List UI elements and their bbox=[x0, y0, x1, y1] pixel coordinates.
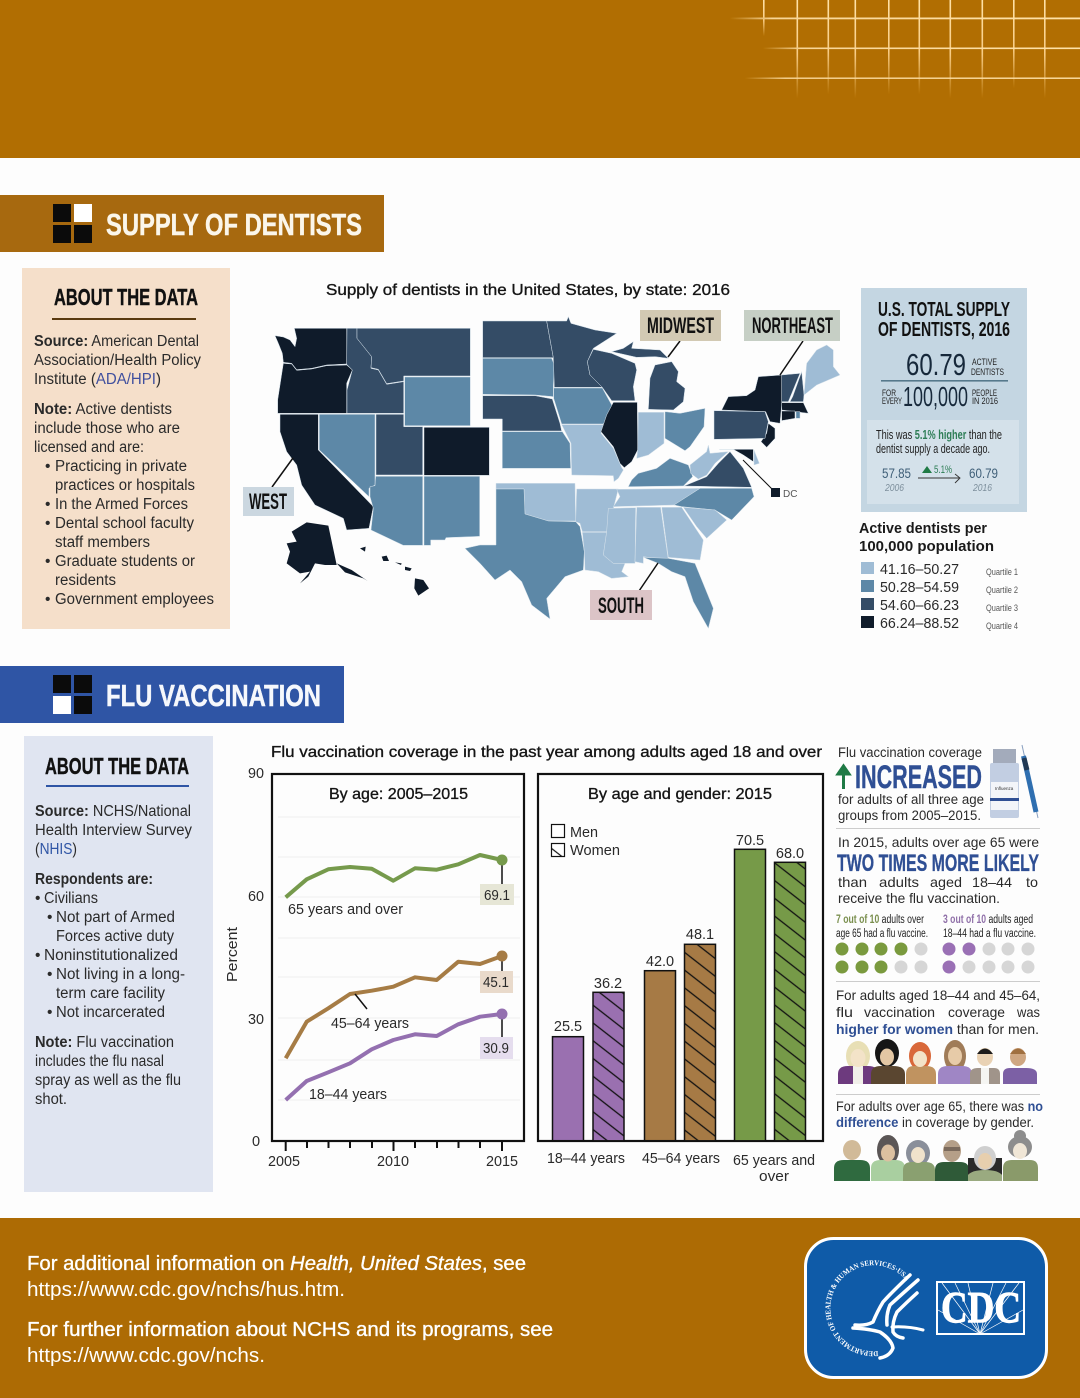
panel: U.S. total supply of dentists: dentist supply a decade ago. bbox=[876, 441, 990, 456]
map legend: active dentists per 100,000 population: 50.28–54.59 bbox=[880, 580, 959, 596]
bar chart: by age and gender 2015: 48.1 bbox=[686, 927, 714, 943]
footer text: For additional information on Health, United States, see bbox=[27, 1253, 526, 1275]
panel: about the data (flu): (NHIS) bbox=[35, 841, 77, 858]
callout: no difference: difference in coverage by gender. bbox=[836, 1114, 1034, 1130]
region label: northeast bbox=[744, 310, 840, 375]
callout: coverage increased: INCREASED bbox=[855, 759, 982, 795]
panel: about the data (dentists): Institute (ADA/HPI) bbox=[34, 371, 161, 388]
icon: HHS eagle seal: DEPARTMENT OF HEALTH & HUMAN SERVICES·USA bbox=[825, 1260, 907, 1356]
line chart: by age 2005-2015: Percent bbox=[225, 927, 241, 982]
panel: about the data (flu): term care facility bbox=[56, 985, 165, 1002]
panel: about the data (flu): includes the flu nasal bbox=[35, 1053, 164, 1070]
callout: two times more likely bbox=[837, 834, 1039, 906]
panel: about the data (flu): Health Interview Survey bbox=[35, 822, 192, 839]
panel: about the data (flu): Not living in a long- bbox=[56, 966, 185, 983]
line chart: by age 2005-2015: 2005 bbox=[268, 1154, 300, 1170]
panel: about the data (dentists): • bbox=[45, 591, 50, 608]
map legend: active dentists per 100,000 population: 100,000 population bbox=[859, 538, 994, 555]
callout: higher for women: flu bbox=[836, 1004, 853, 1020]
panel: about the data (flu): • bbox=[47, 966, 52, 983]
map legend: active dentists per 100,000 population: 66.24–88.52 bbox=[880, 616, 959, 632]
panel: about the data (dentists): In the Armed Forces bbox=[55, 496, 188, 513]
chart title: Flu vaccination coverage in the past year among adults aged 18 and over bbox=[271, 744, 823, 761]
panel: U.S. total supply of dentists: FOR bbox=[882, 388, 896, 399]
panel: U.S. total supply of dentists: ACTIVE bbox=[972, 357, 997, 368]
series: 18-44 years: 30.9 bbox=[483, 1041, 509, 1057]
panel: about the data (flu): ABOUT THE DATA bbox=[45, 753, 189, 779]
line chart: by age 2005-2015: By age: 2005–2015 bbox=[329, 786, 468, 803]
footer text bbox=[27, 1253, 553, 1367]
map legend: active dentists per 100,000 population: Quartile 4 bbox=[986, 621, 1018, 632]
panel: about the data (flu): shot. bbox=[35, 1091, 67, 1108]
map title: Supply of dentists in the United States, by state: 2016 bbox=[326, 282, 730, 299]
line chart: by age 2005-2015: 30 bbox=[248, 1012, 264, 1028]
panel: about the data (dentists): Practicing in private bbox=[55, 458, 187, 475]
panel: about the data (dentists): Source: American Dental bbox=[34, 333, 199, 350]
callout: no difference: For adults over age 65, there was no bbox=[836, 1098, 1043, 1114]
panel: about the data (dentists): Note: Active dentists bbox=[34, 401, 172, 418]
panel: about the data (dentists): Graduate students or bbox=[55, 553, 195, 570]
bar chart: by age and gender 2015: 70.5 bbox=[736, 833, 764, 849]
region label: west: WEST bbox=[249, 489, 287, 514]
icon: green up arrow bbox=[838, 766, 849, 789]
panel: about the data (flu): • bbox=[35, 947, 40, 964]
panel: about the data (dentists): practices or hospitals bbox=[55, 477, 195, 494]
panel: U.S. total supply of dentists: 57.85 bbox=[882, 465, 911, 481]
callout: two times more likely: 18–44 bbox=[972, 874, 1012, 890]
region label: midwest: MIDWEST bbox=[647, 313, 714, 338]
pictogram: 3 out of 10 adults aged 18-44: 3 out of 10 adults aged bbox=[943, 914, 1033, 926]
line chart: by age 2005-2015: 90 bbox=[248, 766, 264, 782]
bar chart: by age and gender 2015: 45–64 years bbox=[642, 1151, 720, 1167]
footer text: https://www.cdc.gov/nchs. bbox=[27, 1345, 265, 1367]
callout: coverage increased: for adults of all three age bbox=[838, 792, 984, 807]
callout: higher for women: was bbox=[1016, 1004, 1040, 1020]
section heading: supply of dentists bbox=[0, 195, 384, 252]
panel: about the data (dentists): Dental school faculty bbox=[55, 515, 194, 532]
icon: vaccine vial and syringe bbox=[990, 745, 1038, 818]
panel: about the data (dentists): ABOUT THE DATA bbox=[54, 284, 198, 310]
series: 65 years and over: 69.1 bbox=[484, 888, 510, 904]
panel: about the data (dentists) bbox=[22, 268, 230, 629]
panel: U.S. total supply of dentists: This was 5.1% higher than the bbox=[876, 427, 1002, 442]
bar chart: by age and gender 2015: 65 years and bbox=[733, 1153, 815, 1169]
map legend: active dentists per 100,000 population: 41.16–50.27 bbox=[880, 562, 959, 578]
footer text: For further information about NCHS and its programs, see bbox=[27, 1319, 553, 1341]
bar chart: by age and gender 2015: 42.0 bbox=[646, 954, 674, 970]
series: 18-44 years bbox=[286, 1008, 513, 1103]
panel: about the data (flu): Noninstitutionalized bbox=[44, 947, 178, 964]
panel: about the data (dentists): include those who are bbox=[34, 420, 180, 437]
line chart: by age 2005-2015: 60 bbox=[248, 889, 264, 905]
map legend: active dentists per 100,000 population: Active dentists per bbox=[859, 520, 987, 537]
panel: U.S. total supply of dentists: 2016 bbox=[972, 482, 992, 494]
panel: about the data (dentists): staff members bbox=[55, 534, 150, 551]
series: 45-64 years bbox=[286, 950, 513, 1058]
panel: U.S. total supply of dentists: 60.79 bbox=[969, 465, 998, 481]
panel: about the data (flu): Source: NCHS/National bbox=[35, 803, 191, 820]
panel: about the data (flu): spray as well as the flu bbox=[35, 1072, 181, 1089]
callout: higher for women: vaccination bbox=[864, 1004, 935, 1020]
callout: two times more likely: aged bbox=[930, 874, 962, 890]
DC marker: DC bbox=[783, 489, 797, 500]
map legend: active dentists per 100,000 population: Quartile 1 bbox=[986, 567, 1018, 578]
bar legend: Men bbox=[570, 825, 598, 841]
bar chart: by age and gender 2015: over bbox=[759, 1169, 789, 1185]
panel: about the data (flu): • bbox=[35, 890, 40, 907]
bar chart: by age and gender 2015: 25.5 bbox=[554, 1019, 582, 1035]
pictogram: 3 out of 10 adults aged 18-44: 18–44 had a flu vaccine. bbox=[943, 928, 1036, 940]
callout: higher for women bbox=[836, 987, 1040, 1037]
panel: about the data (dentists): residents bbox=[55, 572, 116, 589]
series: 18-44 years: 18–44 years bbox=[309, 1087, 387, 1103]
region label: northeast: NORTHEAST bbox=[752, 313, 833, 338]
panel: U.S. total supply of dentists: 60.79 bbox=[906, 347, 966, 382]
series: 45-64 years: 45.1 bbox=[483, 975, 509, 991]
region label: midwest bbox=[640, 310, 721, 357]
region label: west bbox=[243, 458, 294, 516]
callout: two times more likely: adults bbox=[879, 874, 919, 890]
bar legend bbox=[552, 824, 620, 859]
panel: U.S. total supply of dentists: IN 2016 bbox=[972, 396, 998, 407]
callout: higher for women: coverage bbox=[948, 1004, 1005, 1020]
map legend: active dentists per 100,000 population bbox=[859, 520, 1018, 632]
callout: no difference bbox=[836, 1098, 1043, 1130]
icon: group of older adults bbox=[834, 1130, 1038, 1181]
callout: higher for women: higher for women than for men. bbox=[836, 1021, 1039, 1037]
section heading: flu vaccination bbox=[0, 666, 344, 723]
panel: U.S. total supply of dentists: EVERY bbox=[882, 396, 902, 407]
panel: U.S. total supply of dentists: DENTISTS bbox=[971, 367, 1004, 378]
callout: two times more likely: In 2015, adults over age 65 were bbox=[838, 834, 1039, 850]
panel: U.S. total supply of dentists: OF DENTISTS, 2016 bbox=[878, 319, 1010, 341]
panel: about the data (flu): Civilians bbox=[44, 890, 98, 907]
choropleth map of the United States bbox=[275, 317, 840, 628]
line chart: by age 2005-2015: 2010 bbox=[377, 1154, 409, 1170]
callout: coverage increased bbox=[838, 745, 984, 823]
callout: two times more likely: receive the flu vaccination. bbox=[838, 890, 1000, 906]
line chart: by age 2005-2015: 0 bbox=[252, 1134, 260, 1150]
panel: about the data (flu) bbox=[24, 736, 213, 1192]
divider bbox=[836, 981, 1040, 982]
callout: coverage increased: Flu vaccination coverage bbox=[838, 745, 982, 760]
icon: CDC logo: CDC bbox=[941, 1283, 1021, 1332]
bar chart: by age and gender 2015: By age and gender: 2015 bbox=[588, 786, 772, 803]
panel: U.S. total supply of dentists: 100,000 bbox=[903, 381, 968, 412]
panel: about the data (dentists): Association/Health Policy bbox=[34, 352, 201, 369]
callout: two times more likely: than bbox=[838, 874, 867, 890]
divider bbox=[836, 828, 1040, 829]
bar chart: by age and gender 2015: 18–44 years bbox=[547, 1151, 625, 1167]
panel: about the data (flu): Respondents are: bbox=[35, 871, 153, 888]
bar legend: Women bbox=[570, 843, 620, 859]
icon: vaccine vial and syringe: Influenza bbox=[995, 786, 1014, 791]
icon: group of younger adults bbox=[838, 1039, 1037, 1084]
map legend: active dentists per 100,000 population: 54.60–66.23 bbox=[880, 598, 959, 614]
panel: about the data (dentists): licensed and are: bbox=[34, 439, 144, 456]
divider bbox=[836, 1094, 1040, 1095]
section heading: flu vaccination: FLU VACCINATION bbox=[106, 678, 321, 713]
header band with grid decoration bbox=[0, 0, 1080, 158]
panel: about the data (dentists): • bbox=[45, 553, 50, 570]
series: 45-64 years: 45–64 years bbox=[331, 1016, 409, 1032]
panel: U.S. total supply of dentists: 2006 bbox=[884, 482, 904, 494]
callout: coverage increased: groups from 2005–2015. bbox=[838, 808, 981, 823]
bar chart: by age and gender 2015 bbox=[538, 774, 823, 1185]
footer text: https://www.cdc.gov/nchs/hus.htm. bbox=[27, 1279, 345, 1301]
panel: U.S. total supply of dentists: U.S. TOTAL SUPPLY bbox=[878, 299, 1010, 321]
callout: two times more likely: to bbox=[1026, 874, 1038, 890]
panel: about the data (dentists): • bbox=[45, 496, 50, 513]
pictogram: 7 out of 10 adults over age 65: 7 out of 10 adults over bbox=[836, 914, 924, 926]
series: 65 years and over: 65 years and over bbox=[288, 902, 403, 918]
section heading: supply of dentists: SUPPLY OF DENTISTS bbox=[106, 207, 362, 242]
footer band bbox=[0, 1218, 1080, 1398]
line chart: by age 2005-2015: 2015 bbox=[486, 1154, 518, 1170]
DC marker bbox=[743, 460, 797, 500]
panel: about the data (dentists): • bbox=[45, 458, 50, 475]
region label: south: SOUTH bbox=[598, 593, 644, 618]
panel: about the data (flu): • bbox=[47, 1004, 52, 1021]
pictogram: 7 out of 10 adults over age 65 bbox=[836, 914, 928, 974]
map legend: active dentists per 100,000 population: Quartile 3 bbox=[986, 603, 1018, 614]
panel: about the data (flu): • bbox=[47, 909, 52, 926]
panel: about the data (flu): Not incarcerated bbox=[56, 1004, 165, 1021]
logos: HHS and CDC bbox=[804, 1237, 1048, 1379]
panel: U.S. total supply of dentists: 5.1% bbox=[934, 464, 952, 476]
panel: about the data (dentists): • bbox=[45, 515, 50, 532]
panel: about the data (flu): Forces active duty bbox=[56, 928, 174, 945]
panel: U.S. total supply of dentists bbox=[861, 288, 1027, 512]
pictogram: 7 out of 10 adults over age 65: age 65 had a flu vaccine. bbox=[836, 928, 928, 940]
panel: about the data (flu): Not part of Armed bbox=[56, 909, 175, 926]
map legend: active dentists per 100,000 population: Quartile 2 bbox=[986, 585, 1018, 596]
panel: U.S. total supply of dentists: PEOPLE bbox=[972, 388, 997, 399]
callout: higher for women: For adults aged 18–44 and 45–64, bbox=[836, 987, 1040, 1003]
region label: south bbox=[590, 563, 658, 620]
panel: about the data (flu): Note: Flu vaccination bbox=[35, 1034, 174, 1051]
bar chart: by age and gender 2015: 36.2 bbox=[594, 976, 622, 992]
series: 65 years and over bbox=[286, 854, 514, 918]
panel: about the data (dentists): Government employees bbox=[55, 591, 214, 608]
bar chart: by age and gender 2015: 68.0 bbox=[776, 846, 804, 862]
line chart: by age 2005-2015 bbox=[225, 766, 524, 1170]
pictogram: 3 out of 10 adults aged 18-44 bbox=[942, 914, 1036, 974]
